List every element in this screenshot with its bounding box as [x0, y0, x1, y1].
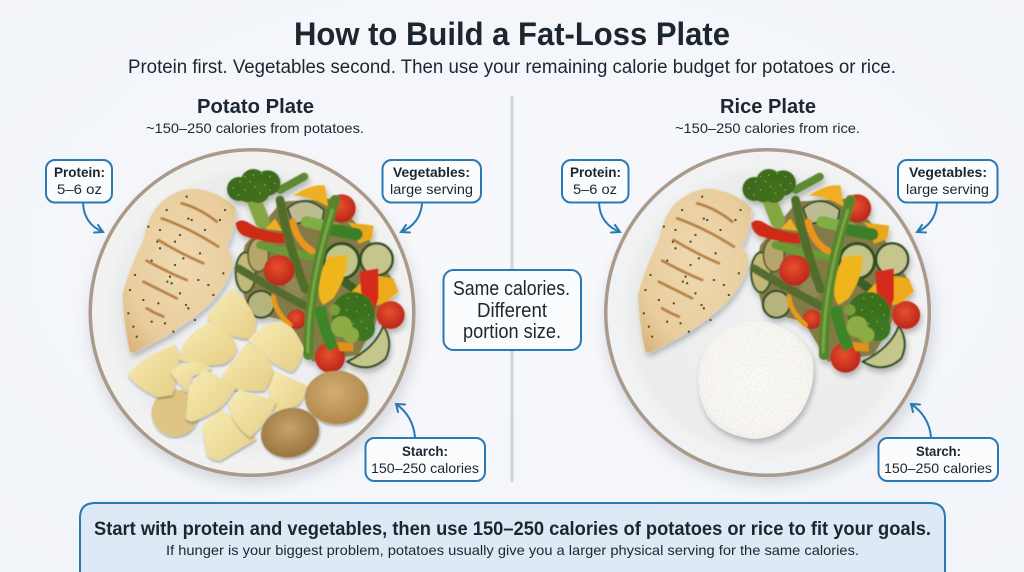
callout: protein (potato plate): Protein: — [54, 164, 105, 180]
rice mound — [698, 321, 813, 439]
callout: vegetables (rice plate) — [898, 160, 998, 232]
callout: vegetables (potato plate) — [382, 160, 481, 232]
callout: starch (rice plate) — [878, 404, 998, 481]
callout: starch (potato plate): Starch: — [402, 443, 448, 459]
plate — [604, 148, 931, 477]
plate — [88, 148, 416, 477]
subtitle: Protein first. Vegetables second. Then use your remaining calorie budget for potatoes or rice. — [128, 57, 896, 78]
arrow: vegetables — [401, 204, 422, 232]
callout: vegetables (potato plate): large serving — [390, 181, 473, 197]
callout: protein (rice plate) — [562, 160, 628, 232]
arrow: protein — [599, 203, 620, 232]
mixed vegetables — [227, 169, 405, 373]
plate shadow — [90, 160, 418, 484]
callout: starch (potato plate) — [366, 404, 485, 481]
callout: same calories — [444, 270, 581, 350]
callout: starch (potato plate): 150–250 calories — [371, 460, 479, 476]
callout: starch (rice plate): 150–250 calories — [884, 460, 992, 476]
callout: protein (potato plate) — [46, 160, 112, 232]
chicken breast — [638, 189, 751, 353]
subheading: potato calories: ~150–250 calories from potatoes. — [146, 120, 364, 136]
panel: potato plate — [88, 96, 418, 484]
summary headline: Start with protein and vegetables, then use 150–250 calories of potatoes or rice to fit your goals. — [94, 518, 931, 540]
callout: same calories: Different — [477, 300, 547, 322]
food: chicken, vegetables, potatoes — [123, 169, 405, 464]
callout: protein (rice plate): 5–6 oz — [573, 181, 617, 197]
plate shadow — [606, 160, 934, 484]
arrow: protein — [83, 203, 103, 232]
callout: same calories: Same calories. — [453, 278, 570, 300]
center divider — [510, 96, 514, 482]
callout: starch (rice plate): Starch: — [916, 443, 961, 459]
subheading: rice calories: ~150–250 calories from rice. — [675, 120, 860, 136]
title: How to Build a Fat-Loss Plate — [294, 16, 730, 52]
callout: protein (potato plate): 5–6 oz — [57, 181, 102, 197]
callout: vegetables (potato plate): Vegetables: — [393, 164, 470, 180]
callout: protein (rice plate): Protein: — [570, 164, 621, 180]
callout: vegetables (rice plate): large serving — [906, 181, 989, 197]
callout: vegetables (rice plate): Vegetables: — [909, 164, 987, 180]
arrow: starch — [911, 404, 931, 437]
heading: potato plate: Potato Plate — [197, 96, 314, 118]
arrow: vegetables — [917, 204, 937, 232]
callout: same calories: portion size. — [463, 321, 561, 343]
heading: rice plate: Rice Plate — [720, 96, 816, 118]
panel: rice plate — [604, 96, 934, 484]
arrow: starch — [396, 404, 415, 437]
mixed vegetables — [742, 169, 920, 373]
bottom summary panel — [80, 503, 945, 572]
food: chicken, vegetables, rice — [638, 169, 920, 439]
chicken breast — [123, 189, 236, 353]
potatoes — [129, 289, 368, 464]
summary note: If hunger is your biggest problem, potatoes usually give you a larger physical serving for the same calories. — [166, 542, 859, 558]
